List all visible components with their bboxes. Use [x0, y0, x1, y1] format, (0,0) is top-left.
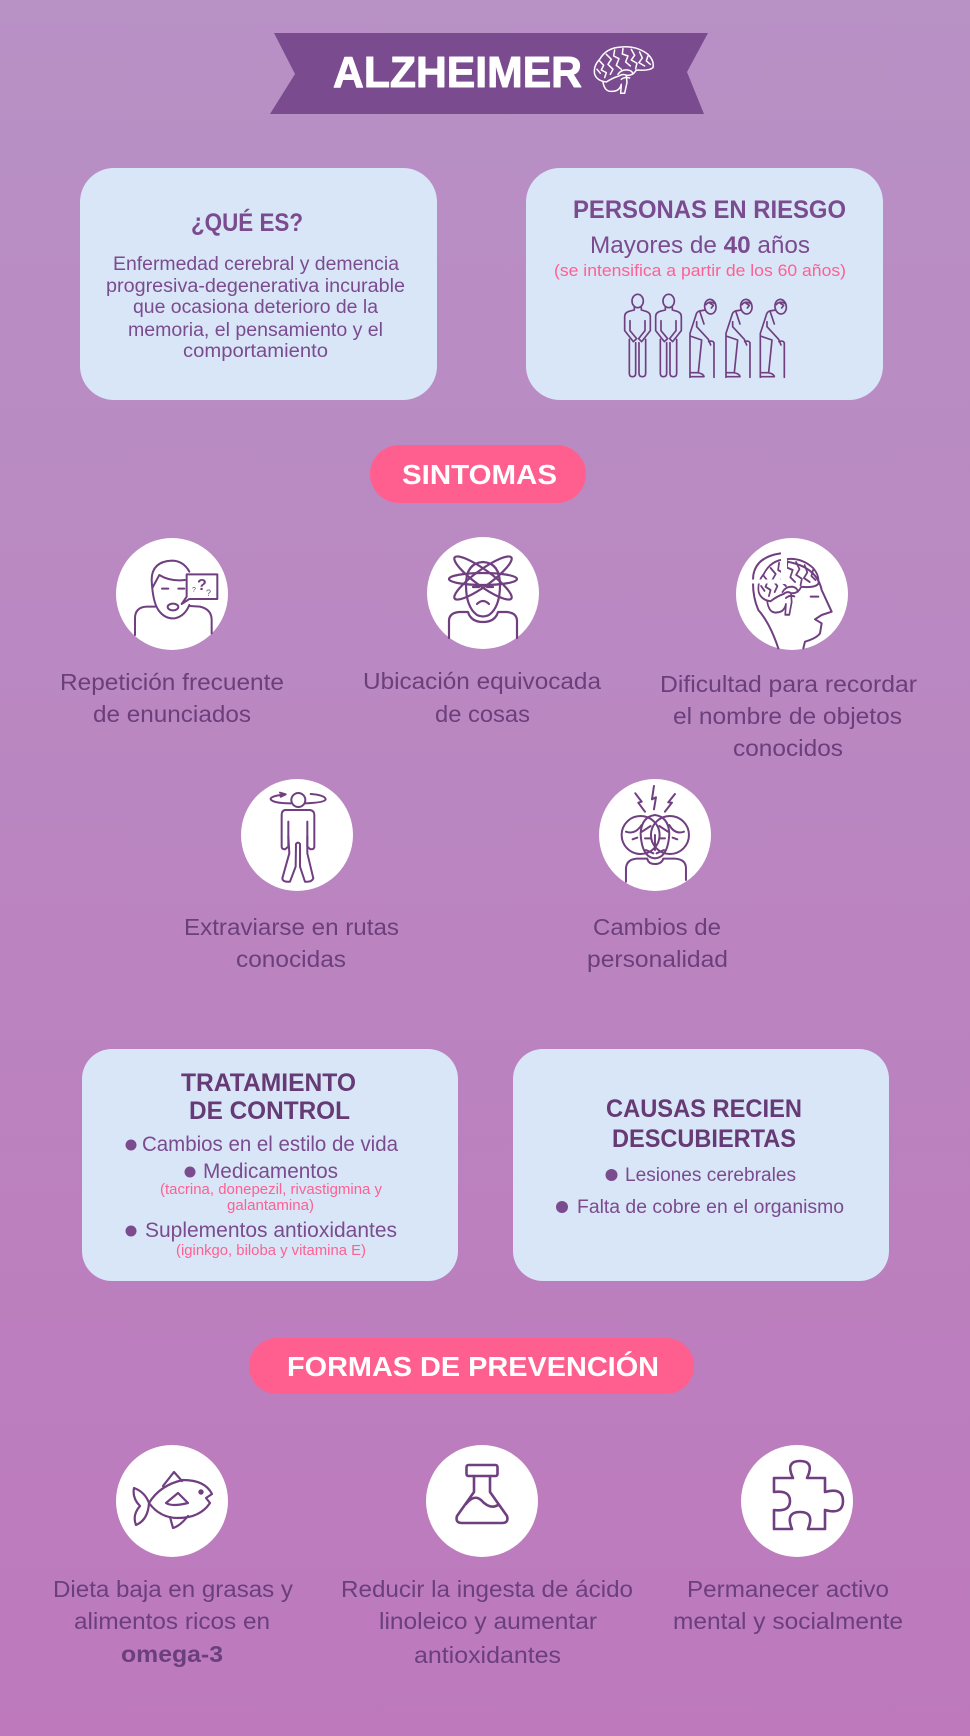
symptom: ubicación [363, 537, 601, 727]
icon: fish [116, 1445, 228, 1557]
label: conocidas [236, 946, 346, 972]
list: tratamientos: Suplementos antioxidantes [145, 1219, 397, 1242]
label: Dificultad para recordar [660, 671, 917, 697]
label: Reducir la ingesta de ácido [341, 1576, 633, 1602]
label [660, 671, 917, 761]
symptom: repetición [60, 538, 284, 727]
label [184, 914, 399, 972]
list: causas [556, 1165, 844, 1218]
prevention: dieta [53, 1445, 294, 1667]
panel: tratamiento de control [82, 1049, 458, 1281]
icon: three faces [599, 779, 711, 891]
icon: flask [426, 1445, 538, 1557]
label: mental y socialmente [673, 1608, 903, 1634]
icon: head with brain [736, 538, 848, 650]
icon: brain [594, 47, 653, 93]
icon: person speaking: ? [192, 587, 196, 594]
icon: people aging [625, 294, 787, 377]
heading: tratamiento: DE CONTROL [189, 1097, 350, 1125]
text block: definición: comportamiento [183, 341, 328, 362]
label: alimentos ricos en [74, 1608, 270, 1634]
label [53, 1576, 294, 1667]
label: Dieta baja en grasas y [53, 1576, 294, 1602]
label: Permanecer activo [687, 1576, 889, 1602]
heading pill: sintomas: SINTOMAS [402, 459, 557, 490]
label: Extraviarse en rutas [184, 914, 399, 940]
list: tratamientos: (iginkgo, biloba y vitamina E) [176, 1242, 366, 1259]
heading: personas en riesgo: PERSONAS EN RIESGO [573, 196, 846, 224]
heading: tratamiento: TRATAMIENTO [181, 1069, 356, 1097]
icon: person speaking: ? [197, 577, 207, 594]
list: tratamientos [126, 1133, 398, 1259]
heading: causas [606, 1095, 802, 1153]
text block: definición [106, 254, 405, 362]
icon: head with orbits [427, 537, 539, 649]
symptom: personalidad [587, 779, 728, 972]
label: linoleico y aumentar [379, 1608, 597, 1634]
heading: qué es: ¿QUÉ ES? [191, 208, 303, 237]
heading: causas: CAUSAS RECIEN [606, 1095, 802, 1123]
icon: puzzle piece [741, 1445, 853, 1557]
panel: qué es [80, 168, 437, 400]
text block: definición: memoria, el pensamiento y el [128, 320, 383, 341]
label [341, 1576, 633, 1668]
label: el nombre de objetos [673, 703, 902, 729]
symptom: recordar [660, 538, 917, 761]
heading pill: formas de prevención: FORMAS DE PREVENCIÓN [287, 1351, 659, 1382]
label [363, 668, 601, 727]
prevention: activo [673, 1445, 903, 1634]
heading: tratamiento [181, 1069, 356, 1125]
icon: person speaking [116, 538, 228, 650]
label: Cambios de [593, 914, 721, 940]
label [587, 914, 728, 972]
label: de enunciados [93, 701, 251, 727]
label [60, 669, 284, 727]
heading pill: formas de prevención [249, 1338, 694, 1394]
label: omega-3 [121, 1641, 223, 1667]
text block: definición: progresiva-degenerativa incurable [106, 276, 405, 297]
title banner [270, 33, 708, 114]
heading pill: sintomas [370, 445, 586, 503]
prevention: ácido linoleico [341, 1445, 633, 1668]
list: tratamientos: Cambios en el estilo de vida [142, 1133, 398, 1156]
label: Repetición frecuente [60, 669, 284, 695]
list: causas: Falta de cobre en el organismo [577, 1197, 844, 1218]
label: antioxidantes [414, 1642, 561, 1668]
list: tratamientos: (tacrina, donepezil, rivastigmina y [160, 1181, 382, 1198]
panel: causas recien descubiertas [513, 1049, 889, 1281]
list: tratamientos: galantamina) [227, 1197, 314, 1214]
icon: person with spinning head [241, 779, 353, 891]
text block: definición: Enfermedad cerebral y demencia [113, 254, 399, 275]
symptom: extraviarse [184, 779, 399, 972]
heading: causas: DESCUBIERTAS [612, 1125, 796, 1153]
label: Ubicación equivocada [363, 668, 601, 694]
label: personalidad [587, 946, 728, 972]
panel: personas en riesgo [526, 168, 883, 400]
label: de cosas [435, 701, 530, 727]
label [673, 1576, 903, 1634]
list: tratamientos: Medicamentos [203, 1160, 338, 1183]
icon: person speaking: ? [206, 588, 211, 598]
label: conocidos [733, 735, 843, 761]
text block: definición: que ocasiona deterioro de la [133, 297, 378, 318]
list: causas: Lesiones cerebrales [625, 1165, 796, 1186]
text: mayores de 40 años: Mayores de 40 años [590, 232, 810, 259]
note: edad: (se intensifica a partir de los 60 años) [554, 261, 846, 280]
title: ALZHEIMER [333, 48, 582, 97]
